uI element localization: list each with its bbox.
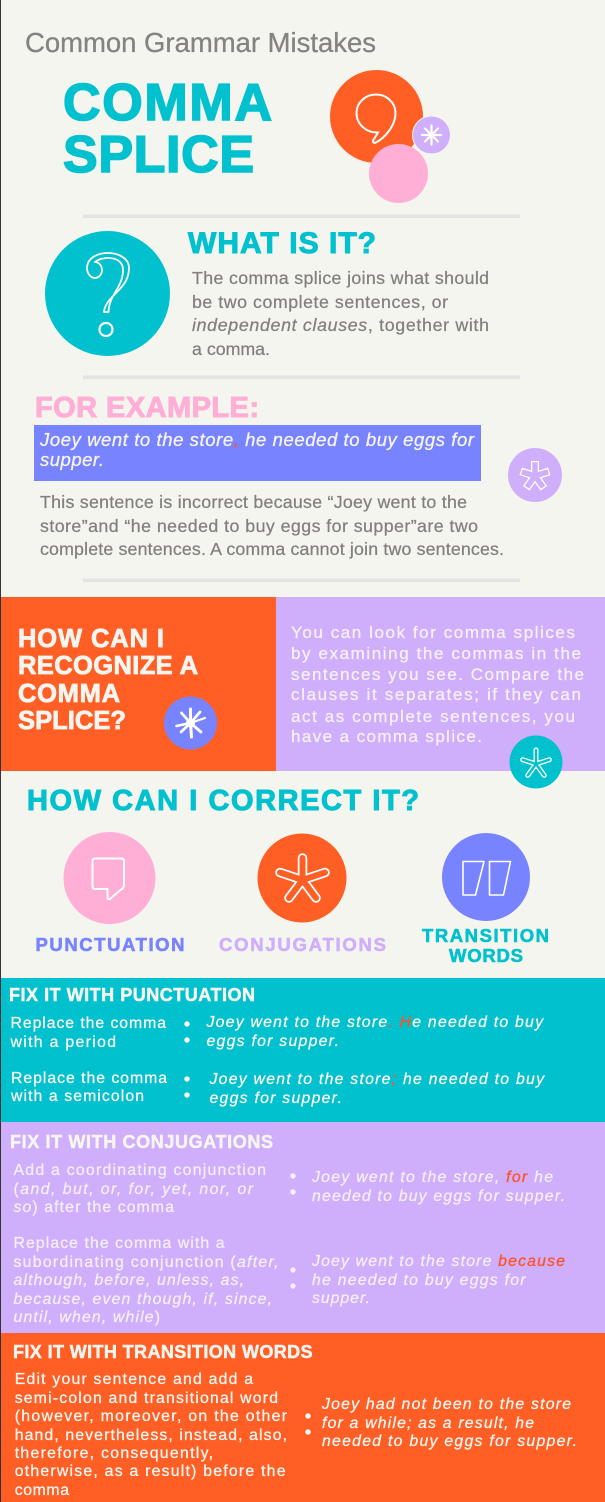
title: comma splice: SPLICE bbox=[63, 126, 254, 184]
text: subordinating example: Joey went to the store because bbox=[311, 1253, 565, 1270]
text: transition instruction: otherwise, as a result) before the bbox=[15, 1463, 286, 1480]
text: subordinating instruction: because, even though, if, since, bbox=[14, 1291, 272, 1308]
title: comma splice: COMMA bbox=[63, 74, 272, 132]
text: definition: independent clauses, together with bbox=[192, 315, 489, 335]
text: semicolon example bbox=[208, 1071, 545, 1107]
text: transition instruction: hand, nevertheless, instead, also, bbox=[15, 1427, 287, 1444]
heading: what is it: WHAT IS IT? bbox=[188, 227, 376, 260]
text: period example: Joey went to the store. He needed to buy bbox=[206, 1014, 544, 1031]
icon: punctuation speech bubble bbox=[64, 832, 156, 924]
text: subordinating instruction: although, before, unless, as, bbox=[14, 1272, 244, 1289]
heading: fix it with conjugations: FIX IT WITH CONJUGATIONS bbox=[10, 1132, 273, 1152]
text: period example: eggs for supper. bbox=[206, 1033, 339, 1050]
text: transition instruction: therefore, consequently, bbox=[15, 1445, 213, 1462]
bullets: semicolon example bbox=[184, 1076, 190, 1098]
bullets: period example bbox=[184, 1021, 190, 1043]
panel: fix it with conjugations bbox=[1, 1122, 605, 1333]
text: transition example: needed to buy eggs for supper. bbox=[322, 1433, 577, 1450]
text: definition bbox=[192, 268, 489, 359]
text: period example bbox=[206, 1014, 544, 1050]
text: recognition advice: sentences you see. Compare the bbox=[291, 665, 584, 684]
text: explanation bbox=[40, 492, 504, 559]
icon: white star in blue circle bbox=[164, 696, 217, 750]
text: transition example: for a while; as a result, he bbox=[322, 1415, 534, 1432]
example sentence box: Joey went to the store, he needed to buy eggs for bbox=[39, 429, 475, 450]
heading: how can I recognize a comma splice bbox=[18, 625, 198, 735]
heading: fix it with transition words: FIX IT WITH TRANSITION WORDS bbox=[13, 1342, 312, 1362]
heading: how can I correct it: HOW CAN I CORRECT IT? bbox=[27, 785, 419, 817]
heading: for example: FOR EXAMPLE: bbox=[35, 392, 259, 424]
text: semicolon instruction: with a semicolon bbox=[10, 1088, 144, 1105]
label: transition words: WORDS bbox=[449, 945, 523, 966]
label: transition words bbox=[422, 925, 549, 966]
heading: common grammar mistakes: Common Grammar Mistakes bbox=[25, 27, 376, 58]
text: explanation: store”and “he needed to buy eggs for supper”are two bbox=[40, 516, 478, 536]
text: coordinating instruction: Add a coordinating conjunction bbox=[14, 1162, 266, 1179]
icon: transition quotes bbox=[442, 833, 530, 921]
icon: asterisk in lilac circle bbox=[508, 448, 562, 502]
text: transition example bbox=[321, 1396, 577, 1450]
text: transition example: Joey had not been to the store bbox=[321, 1396, 571, 1413]
heading: how can I recognize a comma splice: HOW CAN I bbox=[18, 625, 164, 653]
text: period instruction bbox=[10, 1015, 166, 1051]
label: punctuation: PUNCTUATION bbox=[36, 934, 184, 955]
text: subordinating example: supper. bbox=[312, 1290, 370, 1307]
text: subordinating instruction bbox=[14, 1235, 278, 1326]
heading: how can I recognize a comma splice: RECOGNIZE A bbox=[18, 652, 198, 680]
bullets: subordinating example bbox=[290, 1267, 296, 1289]
text: coordinating example bbox=[311, 1169, 565, 1205]
text: definition: be two complete sentences, or bbox=[192, 292, 448, 312]
text: transition instruction: (however, moreover, on the other bbox=[15, 1408, 287, 1425]
text: recognition advice: by examining the commas in the bbox=[291, 644, 581, 663]
text: period instruction: with a period bbox=[10, 1034, 116, 1051]
heading: fix it with punctuation: FIX IT WITH PUNCTUATION bbox=[9, 985, 255, 1005]
text: coordinating instruction bbox=[14, 1162, 266, 1216]
text: definition: a comma. bbox=[192, 339, 270, 359]
text: subordinating instruction: Replace the comma with a bbox=[14, 1235, 225, 1252]
text: explanation: complete sentences. A comma cannot join two sentences. bbox=[40, 539, 504, 559]
panel: recognition advice bbox=[276, 597, 605, 771]
heading: how can I recognize a comma splice: COMMA bbox=[18, 680, 120, 708]
title: comma splice bbox=[63, 74, 272, 184]
text: definition: The comma splice joins what should bbox=[192, 268, 489, 288]
text: recognition advice: act as complete sentences, you bbox=[291, 707, 575, 726]
text: semicolon instruction bbox=[10, 1070, 167, 1105]
bullets: transition example bbox=[305, 1413, 311, 1435]
icon: comma speech bubble cluster bbox=[330, 70, 451, 203]
text: recognition advice: have a comma splice. bbox=[291, 727, 482, 746]
text: subordinating instruction: subordinating conjunction (after, bbox=[14, 1254, 278, 1271]
panel: how can I recognize bbox=[1, 597, 276, 771]
text: coordinating example: Joey went to the store, for he bbox=[311, 1169, 553, 1186]
text: subordinating instruction: until, when, while) bbox=[14, 1309, 160, 1326]
text: transition instruction: semi-colon and transitional word bbox=[15, 1390, 278, 1407]
icon: conjugations asterisk bbox=[258, 834, 346, 922]
text: explanation: This sentence is incorrect because “Joey went to the bbox=[40, 492, 467, 512]
text: period instruction: Replace the comma bbox=[10, 1015, 166, 1032]
icon: question mark bbox=[45, 231, 170, 356]
text: coordinating instruction: (and, but, or, for, yet, nor, or bbox=[14, 1181, 254, 1198]
label: conjugations: CONJUGATIONS bbox=[219, 934, 386, 955]
panel: fix it with punctuation bbox=[1, 978, 605, 1122]
text: coordinating instruction: so) after the comma bbox=[14, 1199, 174, 1216]
heading: how can I recognize a comma splice: SPLICE? bbox=[18, 707, 126, 735]
text: transition instruction: Edit your sentence and add a bbox=[15, 1371, 253, 1388]
label: transition words: TRANSITION bbox=[422, 925, 549, 946]
text: semicolon example: Joey went to the store; he needed to buy bbox=[208, 1071, 545, 1088]
text: recognition advice: You can look for comma splices bbox=[291, 623, 575, 642]
bullets: coordinating example bbox=[290, 1173, 296, 1195]
text: transition instruction: comma bbox=[15, 1482, 69, 1499]
text: coordinating example: needed to buy eggs for supper. bbox=[312, 1188, 565, 1205]
example sentence box: supper. bbox=[40, 449, 104, 470]
example sentence box bbox=[34, 425, 481, 481]
text: transition instruction bbox=[15, 1371, 287, 1499]
panel: fix it with transition words bbox=[1, 1333, 605, 1502]
text: recognition advice: clauses it separates; if they can bbox=[291, 685, 581, 704]
icon: asterisk in teal circle bbox=[510, 736, 562, 788]
text: recognition advice bbox=[291, 623, 584, 746]
text: semicolon instruction: Replace the comma bbox=[11, 1070, 167, 1087]
text: subordinating example bbox=[311, 1253, 565, 1307]
text: subordinating example: he needed to buy eggs for bbox=[312, 1272, 526, 1289]
text: semicolon example: eggs for supper. bbox=[210, 1090, 342, 1107]
